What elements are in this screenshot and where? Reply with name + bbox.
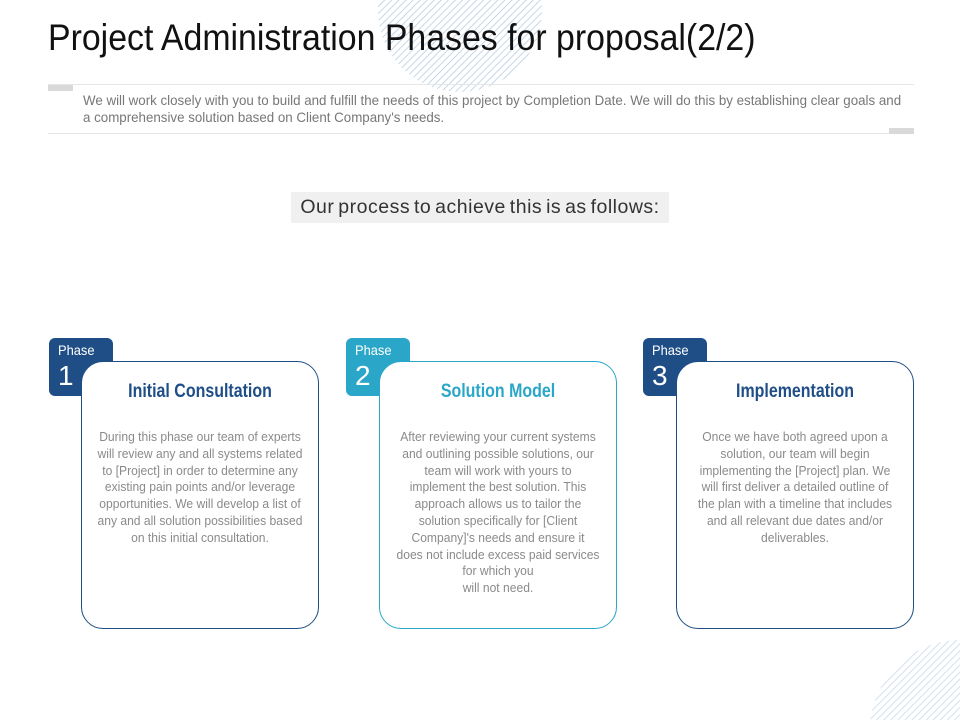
card 1: any and all solution possibilities based: [97, 513, 302, 528]
subheading: Our process to achieve this is as follows:: [300, 196, 660, 218]
tab 3: Phase: [652, 342, 689, 358]
decorative circle bottom right: [870, 640, 960, 720]
card 3: solution, our team will begin: [720, 446, 870, 461]
tab 2: Phase: [355, 342, 392, 358]
card 2: implement the best solution. This: [410, 479, 586, 494]
tab 2: 2: [355, 360, 371, 391]
card 2: After reviewing your current systems: [400, 429, 596, 444]
card 3: the plan with a timeline that includes: [698, 496, 892, 511]
card 3: will first deliver a detailed outline of: [702, 479, 888, 494]
card 1: on this initial consultation.: [131, 530, 269, 545]
card 2: Company]'s needs and ensure it: [411, 530, 585, 545]
card 2: will not need.: [463, 580, 533, 595]
card 2: and outlining possible solutions, our: [402, 446, 594, 461]
card 2: Solution Model: [441, 381, 555, 402]
phase 2: [346, 338, 617, 629]
tab 2: [346, 338, 410, 396]
card 2: for which you: [462, 563, 534, 578]
phase 3: [643, 338, 914, 629]
tab 3: 3: [652, 360, 668, 391]
card 3: Once we have both agreed upon a: [702, 429, 888, 444]
card 1: Initial Consultation: [128, 381, 272, 402]
card 3: [676, 361, 914, 629]
intro text block: a comprehensive solution based on Client Company's needs.: [83, 109, 444, 125]
card 1: opportunities. We will develop a list of: [99, 496, 301, 511]
phase 1: [49, 338, 319, 629]
card 2: does not include excess paid services: [397, 547, 599, 562]
card 1: to [Project] in order to determine any: [102, 463, 298, 478]
card 1: will review any and all systems related: [98, 446, 302, 461]
card 3: and all relevant due dates and/or: [707, 513, 883, 528]
card 2: solution specifically for [Client: [419, 513, 577, 528]
intro text block: We will work closely with you to build and fulfill the needs of this project by Completion Date. We will do this by establishing clear goals and: [83, 92, 901, 108]
card 2: approach allows us to tailor the: [415, 496, 581, 511]
tab 1: [49, 338, 113, 396]
tab 1: 1: [58, 360, 74, 391]
card 3: Implementation: [736, 381, 854, 402]
title: Project Administration Phases for proposal(2/2): [48, 17, 756, 58]
tab 3: [643, 338, 707, 396]
card 2: [379, 361, 617, 629]
intro text block: [48, 84, 914, 134]
card 1: existing pain points and/or leverage: [105, 479, 295, 494]
card 1: During this phase our team of experts: [99, 429, 301, 444]
card 2: team will work with yours to: [424, 463, 572, 478]
card 3: implementing the [Project] plan. We: [700, 463, 890, 478]
card 3: deliverables.: [761, 530, 829, 545]
decorative circle top: [378, 0, 542, 92]
subheading: [291, 192, 669, 223]
tab 1: Phase: [58, 342, 95, 358]
card 1: [81, 361, 319, 629]
